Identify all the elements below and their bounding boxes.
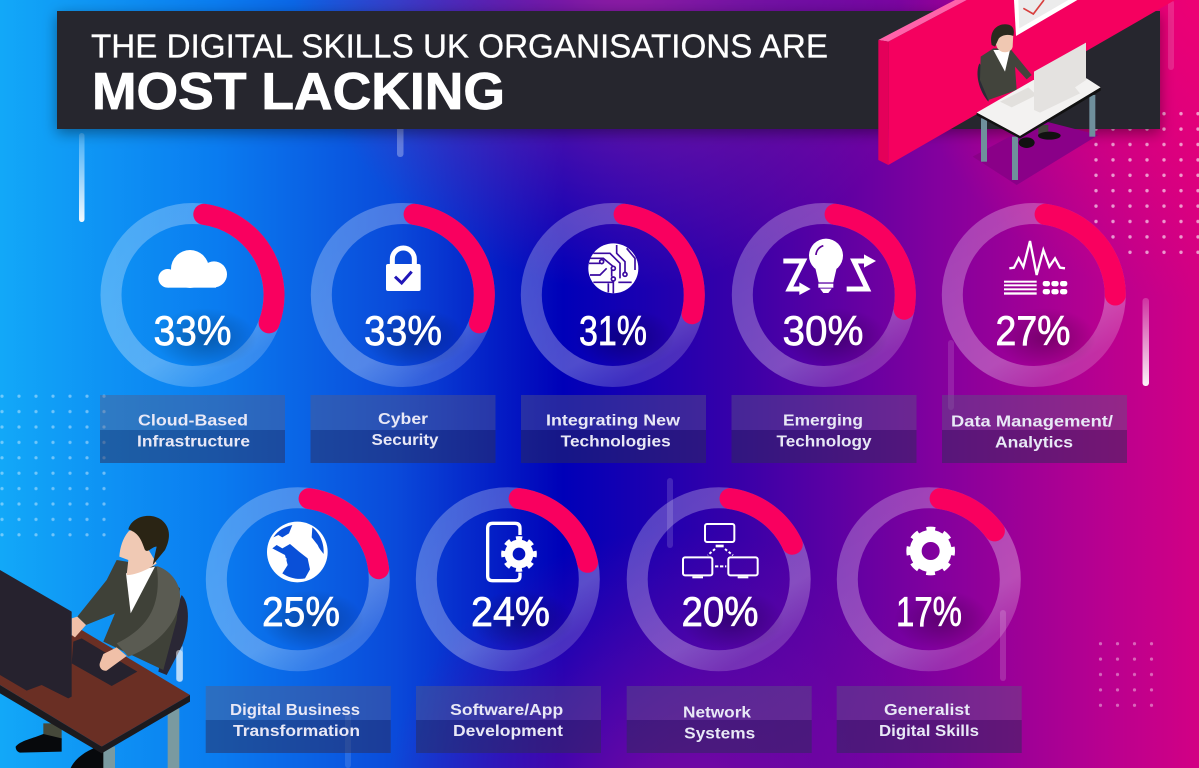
icon: padlock: [386, 248, 421, 291]
title banner: [57, 11, 1160, 129]
label box: [732, 395, 916, 463]
label box: [521, 395, 706, 463]
icon: networked monitors: [683, 524, 758, 577]
label box: Systems: [684, 725, 755, 742]
label box: [416, 686, 601, 753]
label box: [100, 395, 285, 463]
percent: 20%: [682, 588, 758, 635]
icon: gear: [909, 529, 953, 573]
label box: Software/App: [450, 702, 563, 719]
ring chart: [637, 498, 800, 661]
ring chart: [847, 498, 1010, 661]
stat: Data Management/Analytics 27%: [942, 214, 1127, 463]
icon: phone with gear: [488, 523, 535, 581]
ring chart: [531, 214, 694, 376]
stat: Cloud-Based Infrastructure 33%: [100, 214, 285, 463]
percent: 25%: [262, 588, 340, 635]
icon: pulse and data rows: [1004, 241, 1067, 295]
percent: 27%: [996, 307, 1070, 354]
label box: [206, 686, 391, 753]
stat: Software/App Development 24%: [416, 498, 601, 753]
icon: circuit globe: [588, 243, 638, 293]
percent: 33%: [154, 307, 232, 354]
illustration: person at white desk on pink wall: [878, 0, 1175, 185]
label box: Development: [453, 723, 563, 740]
label box: Analytics: [995, 434, 1073, 452]
stat: Generalist Digital Skills 17%: [837, 498, 1022, 753]
ring chart: [426, 498, 589, 661]
label box: Network: [683, 704, 751, 721]
label box: [942, 395, 1127, 463]
ring chart: [742, 214, 905, 376]
label box: Digital Business: [230, 702, 360, 719]
title line 1: THE DIGITAL SKILLS UK ORGANISATIONS ARE: [91, 28, 828, 66]
label box: [627, 686, 812, 753]
icon: globe: [267, 522, 328, 582]
label box: Technology: [776, 434, 872, 450]
label box: [310, 395, 496, 463]
illustration: person at brown desk with monitor: [0, 516, 190, 768]
percent: 17%: [896, 588, 962, 635]
icon: cloud: [158, 250, 227, 288]
label box: [837, 686, 1022, 753]
label box: Emerging: [783, 412, 863, 430]
label box: Digital Skills: [879, 723, 979, 740]
ring chart: [321, 214, 484, 376]
stat: Integrating New Technologies 31%: [521, 214, 706, 463]
percent: 33%: [364, 307, 442, 354]
label box: Cloud-Based: [138, 412, 248, 430]
label box: Infrastructure: [137, 434, 250, 450]
label box: Generalist: [884, 702, 970, 719]
stat: Emerging Technology 30%: [732, 214, 916, 463]
label box: Technologies: [561, 434, 671, 450]
percent: 31%: [579, 307, 647, 354]
title line 2: MOST LACKING: [92, 63, 505, 121]
stat: Network Systems 20%: [627, 498, 812, 753]
ring chart: [952, 214, 1115, 376]
ring chart: [111, 214, 274, 376]
stat: Digital Business Transformation 25%: [206, 498, 391, 753]
percent: 24%: [471, 588, 550, 635]
label box: Cyber: [378, 411, 428, 428]
icon: light bulb with arrows: [783, 239, 876, 295]
stat: Cyber Security 33%: [310, 214, 496, 463]
label box: Transformation: [233, 723, 360, 740]
label box: Security: [372, 432, 439, 449]
label box: Data Management/: [951, 414, 1114, 430]
percent: 30%: [782, 307, 864, 354]
ring chart: [216, 498, 379, 661]
label box: Integrating New: [546, 412, 681, 430]
